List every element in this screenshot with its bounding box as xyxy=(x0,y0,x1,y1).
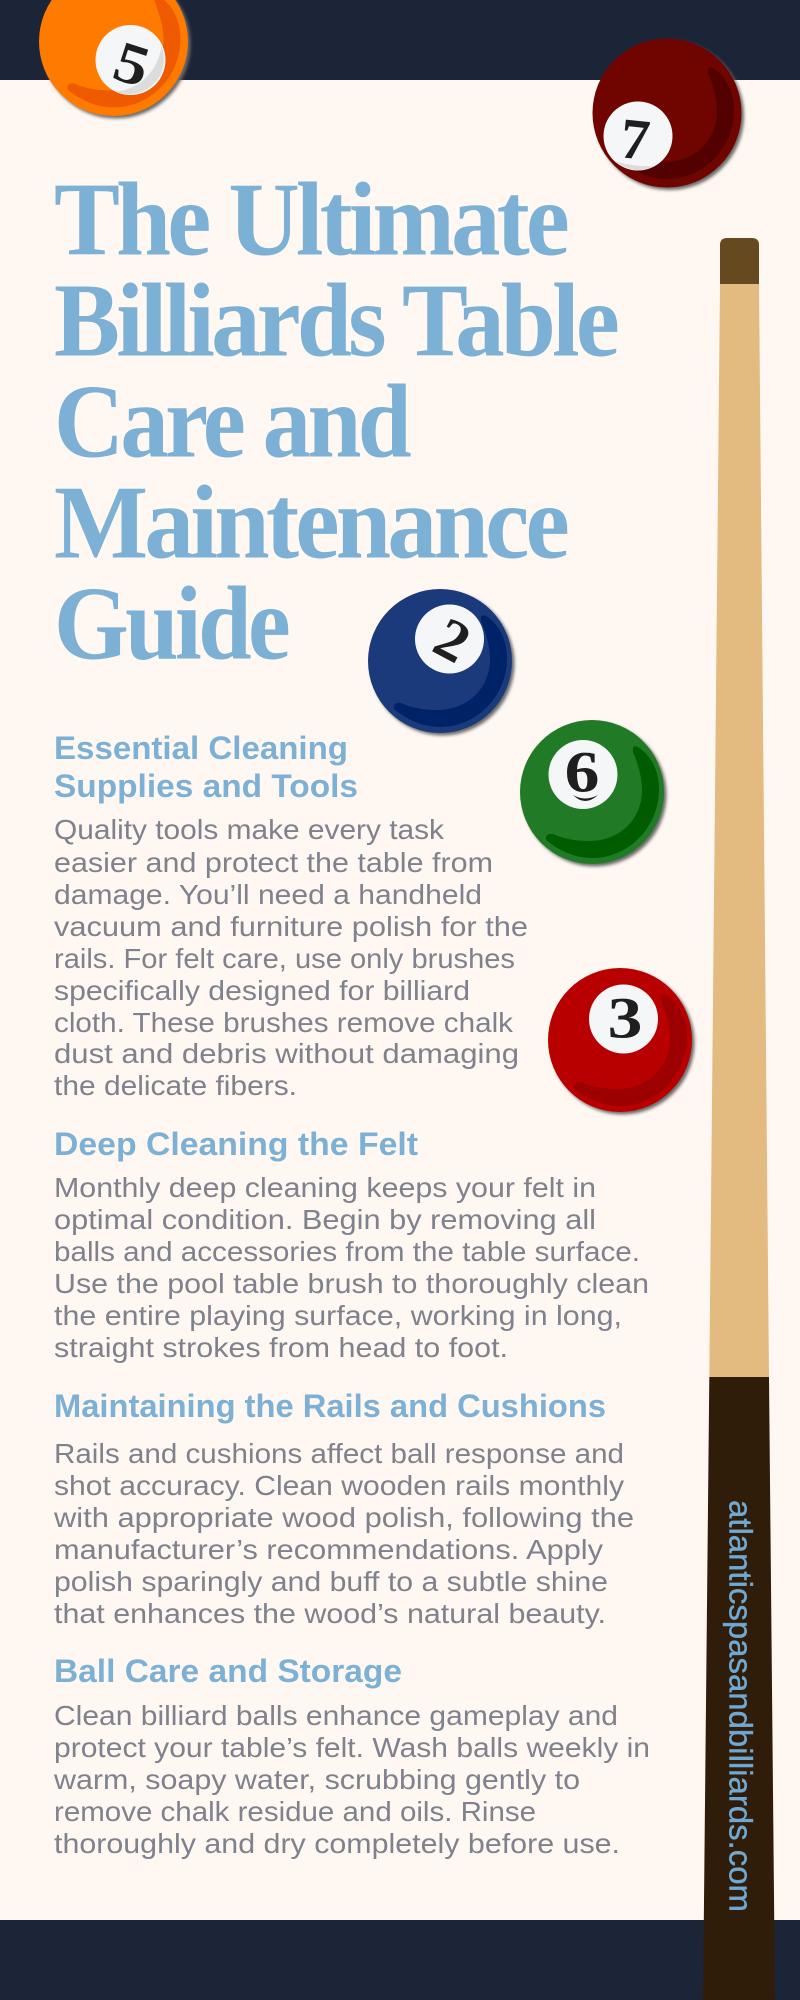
ball 5 orange xyxy=(39,0,190,118)
ball 5 orange: 5 xyxy=(106,28,158,100)
ball 7 maroon: 7 xyxy=(617,105,653,173)
section: deep cleaning the felt xyxy=(54,1126,649,1363)
body text: the entire playing surface, working in long, xyxy=(54,1300,622,1331)
body text: polish sparingly and buff to a subtle shine xyxy=(54,1566,608,1597)
body text: warm, soapy water, scrubbing gently to xyxy=(53,1764,580,1795)
heading: Deep Cleaning the Felt xyxy=(54,1126,418,1162)
heading xyxy=(54,730,358,804)
title line 3: Care and xyxy=(54,362,411,480)
heading: Essential Cleaning xyxy=(54,730,348,766)
body text: Monthly deep cleaning keeps your felt in xyxy=(54,1172,596,1203)
body text: the delicate fibers. xyxy=(54,1070,297,1101)
body text: easier and protect the table from xyxy=(54,847,493,878)
heading: Maintaining the Rails and Cushions xyxy=(54,1388,606,1424)
title line 1: The Ultimate xyxy=(54,160,567,278)
body text xyxy=(53,1700,650,1859)
ball 2 blue xyxy=(368,589,514,736)
heading: Ball Care and Storage xyxy=(54,1653,402,1689)
body text: shot accuracy. Clean wooden rails monthly xyxy=(54,1470,624,1501)
body text: rails. For felt care, use only brushes xyxy=(54,943,515,974)
title line 5: Guide xyxy=(54,564,288,682)
body text: straight strokes from head to foot. xyxy=(54,1332,508,1363)
cue shaft xyxy=(709,284,769,1377)
title line 2: Billiards Table xyxy=(54,262,617,378)
cue butt xyxy=(703,1377,775,2000)
body text: optimal condition. Begin by removing all xyxy=(54,1204,596,1235)
section: maintaining the rails and cushions xyxy=(53,1388,634,1629)
body text: protect your table’s felt. Wash balls weekly in xyxy=(54,1732,650,1763)
bottom navy band xyxy=(0,1920,800,2000)
body text: with appropriate wood polish, following the xyxy=(53,1502,634,1533)
title line 4: Maintenance xyxy=(54,464,567,580)
title xyxy=(54,160,617,682)
body text: Quality tools make every task xyxy=(54,814,444,845)
heading: Supplies and Tools xyxy=(54,768,358,804)
body text: manufacturer’s recommendations. Apply xyxy=(54,1534,603,1565)
ball 6 green: 6 xyxy=(565,740,599,804)
body text: Rails and cushions affect ball response and xyxy=(54,1438,624,1469)
body text: that enhances the wood’s natural beauty. xyxy=(54,1598,606,1629)
body text: Use the pool table brush to thoroughly clean xyxy=(54,1268,649,1299)
ball 6 green xyxy=(520,720,666,866)
billiard cue xyxy=(703,238,775,2000)
section: essential cleaning supplies xyxy=(54,730,528,1101)
ball 2 blue: 2 xyxy=(424,604,481,676)
website url: atlanticspasandbilliards.com xyxy=(722,1500,758,1912)
body text xyxy=(54,814,528,1101)
ball 7 maroon xyxy=(592,38,744,190)
body text xyxy=(54,1172,649,1363)
body text: dust and debris without damaging xyxy=(54,1038,519,1069)
body text: remove chalk residue and oils. Rinse xyxy=(54,1796,536,1827)
body text: Clean billiard balls enhance gameplay and xyxy=(54,1700,618,1731)
body text: damage. You’ll need a handheld xyxy=(54,879,482,910)
body text: vacuum and furniture polish for the xyxy=(54,911,528,942)
cue tip xyxy=(720,238,759,284)
body text: thoroughly and dry completely before use. xyxy=(54,1828,620,1859)
section: ball care and storage xyxy=(53,1653,650,1859)
body text: specifically designed for billiard xyxy=(54,975,470,1006)
ball 3 red xyxy=(548,968,694,1114)
top navy band xyxy=(0,0,800,80)
body text: balls and accessories from the table surface. xyxy=(54,1236,640,1267)
body text: cloth. These brushes remove chalk xyxy=(54,1007,513,1038)
ball 3 red: 3 xyxy=(608,986,642,1050)
body text xyxy=(53,1438,634,1629)
